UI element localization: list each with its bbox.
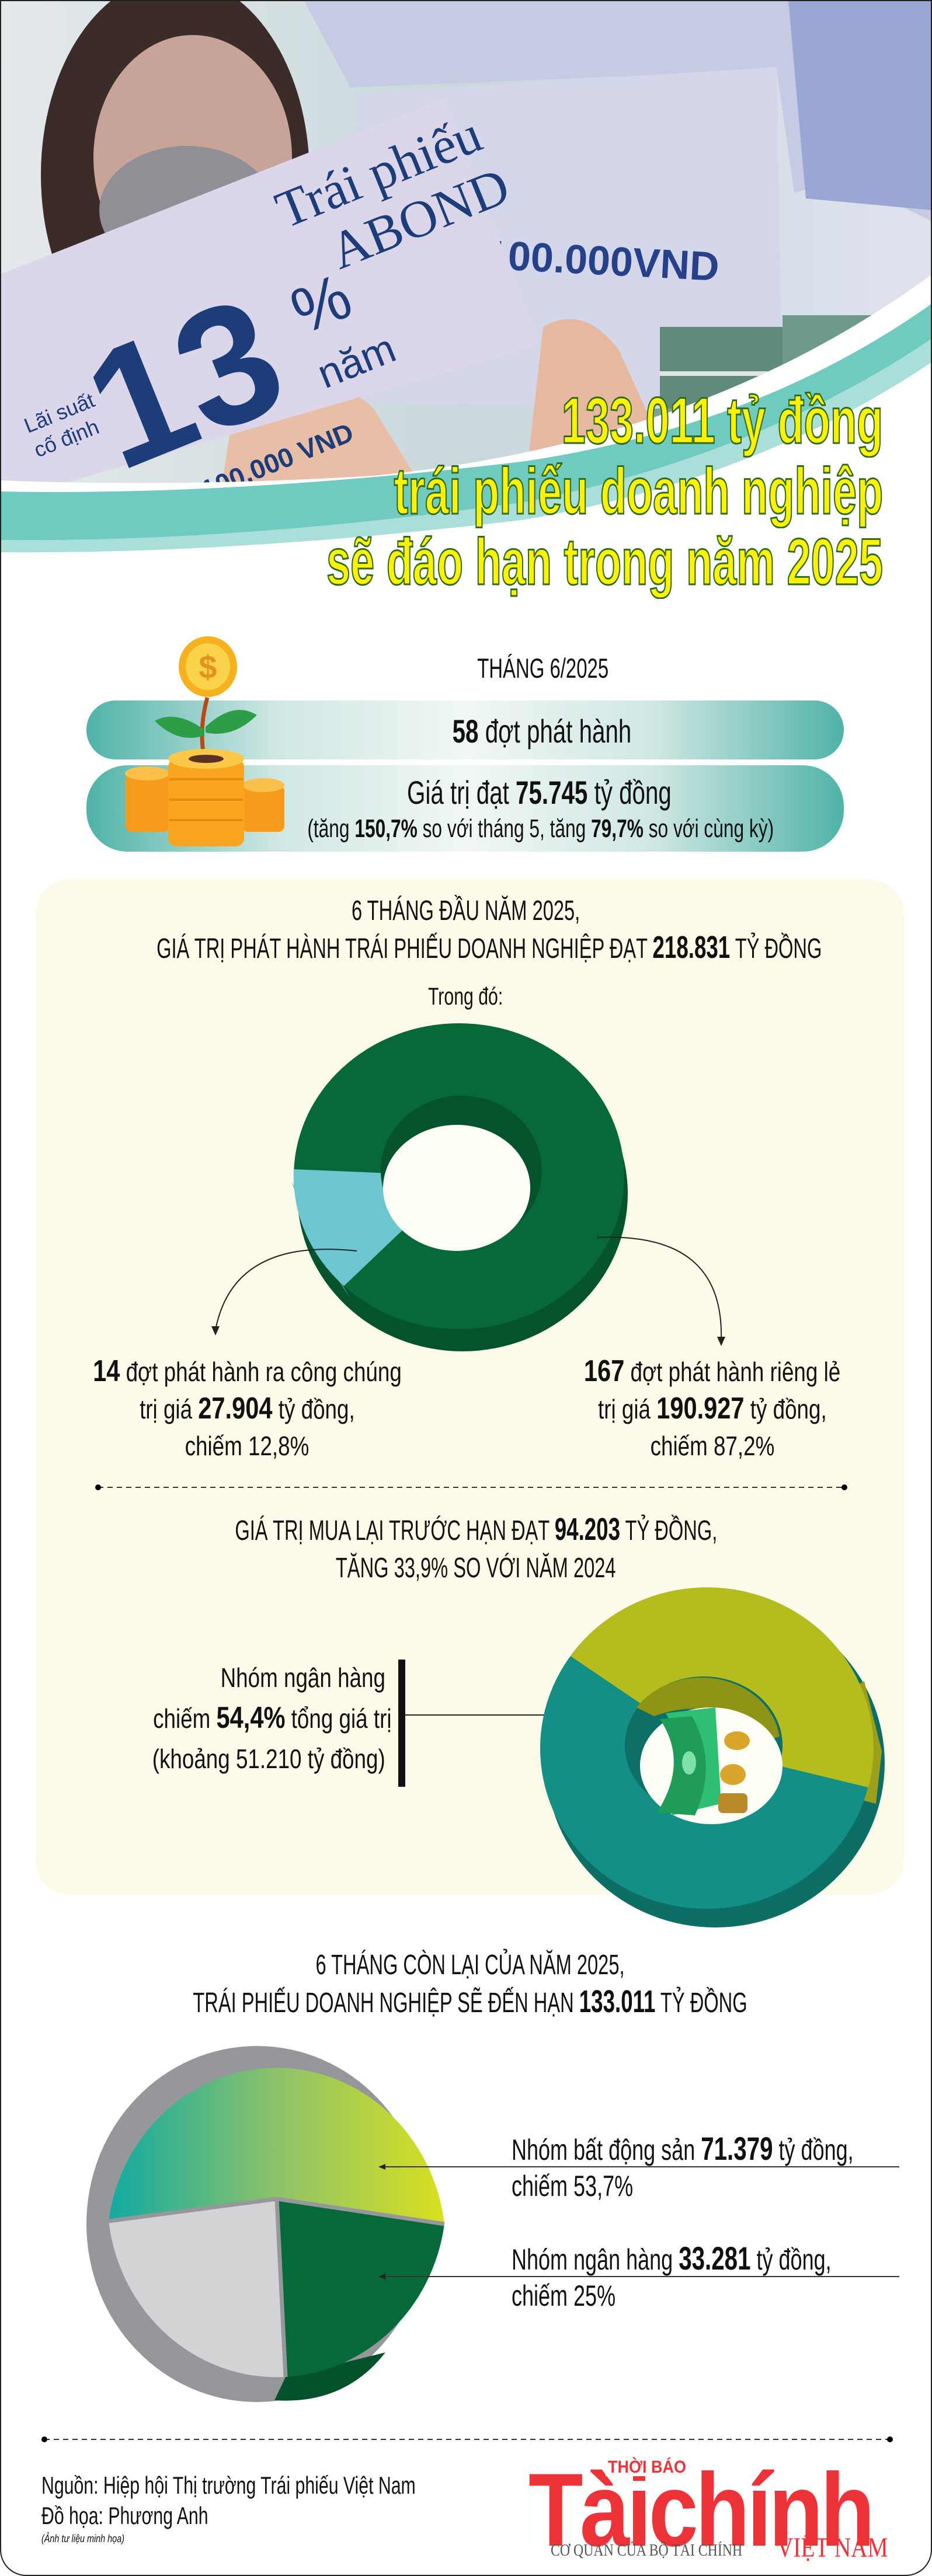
header photo with wave <box>1 1 931 552</box>
pill text 1: 58 đợt phát hành <box>453 713 631 750</box>
icon: coin plant <box>125 636 284 846</box>
header photo with wave: cố định <box>30 414 102 462</box>
header photo with wave: 13 <box>62 260 307 506</box>
heading: buyback: TĂNG 33,9% SO VỚI NĂM 2024 <box>336 1553 616 1584</box>
donut chart 2 <box>398 1587 885 1927</box>
text: public issuance: 14 đợt phát hành ra công chúng <box>93 1354 401 1388</box>
title: trái phiếu doanh nghiệp <box>394 455 883 528</box>
text: bank group buyback: (khoảng 51.210 tỷ đồng) <box>152 1744 385 1774</box>
source text <box>41 2472 416 2544</box>
title: 133.011 tỷ đồng <box>561 384 883 457</box>
header photo with wave: 100.000 VND <box>197 417 357 506</box>
source text: Đồ họa: Phương Anh <box>41 2502 208 2529</box>
source text: (Ảnh tư liệu minh họa) <box>41 2533 124 2544</box>
heading: buyback <box>235 1512 717 1584</box>
text: trong do: Trong đó: <box>428 982 503 1010</box>
header photo with wave: % <box>281 260 361 348</box>
header photo with wave: 100.000VND <box>484 232 721 290</box>
text: real estate <box>512 2130 854 2202</box>
text: public issuance: chiếm 12,8% <box>185 1431 309 1461</box>
logo: VIỆT NAM <box>777 2532 888 2563</box>
heading: remaining 6 months: 6 THÁNG CÒN LẠI CỦA NĂM 2025, <box>315 1950 625 1981</box>
source text: Nguồn: Hiệp hội Thị trường Trái phiếu Việt Nam <box>41 2472 416 2499</box>
heading: remaining 6 months <box>193 1948 747 2019</box>
pill text 3: (tăng 150,7% so với tháng 5, tăng 79,7% so với cùng kỳ) <box>308 814 774 843</box>
header photo with wave: năm <box>311 325 402 397</box>
header photo with wave: ABOND <box>322 157 517 280</box>
text: private issuance: 167 đợt phát hành riêng lẻ <box>584 1354 841 1388</box>
logo: Tàichính <box>528 2452 872 2568</box>
text: real estate: Nhóm bất động sản 71.379 tỷ đồng, <box>512 2130 854 2167</box>
panel: first half 2025 <box>36 879 904 1895</box>
heading: first half: 6 THÁNG ĐẦU NĂM 2025, <box>352 895 580 926</box>
header photo with wave: Trái phiếu <box>268 105 489 239</box>
title: sẽ đáo hạn trong năm 2025 <box>326 525 883 598</box>
pill text 2: Giá trị đạt 75.745 tỷ đồng <box>407 774 671 811</box>
heading: first half <box>157 895 822 965</box>
pill 1 <box>86 700 844 759</box>
icon: coin plant: $ <box>199 649 217 685</box>
pill 2 <box>86 765 844 852</box>
text: private issuance <box>584 1354 841 1461</box>
donut chart 1 <box>211 1023 725 1351</box>
heading: first half: GIÁ TRỊ PHÁT HÀNH TRÁI PHIẾU DOANH NGHIỆP ĐẠT 218.831 TỶ ĐỒNG <box>157 930 822 965</box>
pie chart 3 <box>86 2046 899 2402</box>
text: private issuance: chiếm 87,2% <box>651 1431 774 1461</box>
text: bank group buyback: Nhóm ngân hàng <box>221 1662 385 1693</box>
text: banks <box>512 2240 832 2312</box>
heading: remaining 6 months: TRÁI PHIẾU DOANH NGHIỆP SẼ ĐẾN HẠN 133.011 TỶ ĐỒNG <box>193 1984 747 2019</box>
text: banks: Nhóm ngân hàng 33.281 tỷ đồng, <box>512 2240 832 2277</box>
text: public issuance <box>93 1354 401 1461</box>
heading: buyback: GIÁ TRỊ MUA LẠI TRƯỚC HẠN ĐẠT 94.203 TỶ ĐỒNG, <box>235 1512 717 1547</box>
header photo with wave: Lãi suất <box>20 388 98 438</box>
icon: money <box>657 1707 750 1815</box>
month heading: THÁNG 6/2025 <box>478 653 608 684</box>
text: bank group buyback: chiếm 54,4% tổng giá trị <box>153 1701 392 1735</box>
text: public issuance: trị giá 27.904 tỷ đồng, <box>140 1392 354 1425</box>
text: private issuance: trị giá 190.927 tỷ đồng, <box>598 1392 827 1425</box>
text: banks: chiếm 25% <box>512 2279 615 2312</box>
logo: THỜI BÁO <box>608 2458 686 2477</box>
logo: CƠ QUAN CỦA BỘ TÀI CHÍNH <box>551 2542 742 2560</box>
text: real estate: chiếm 53,7% <box>512 2170 633 2202</box>
title <box>326 384 883 599</box>
text: bank group buyback <box>152 1662 392 1774</box>
